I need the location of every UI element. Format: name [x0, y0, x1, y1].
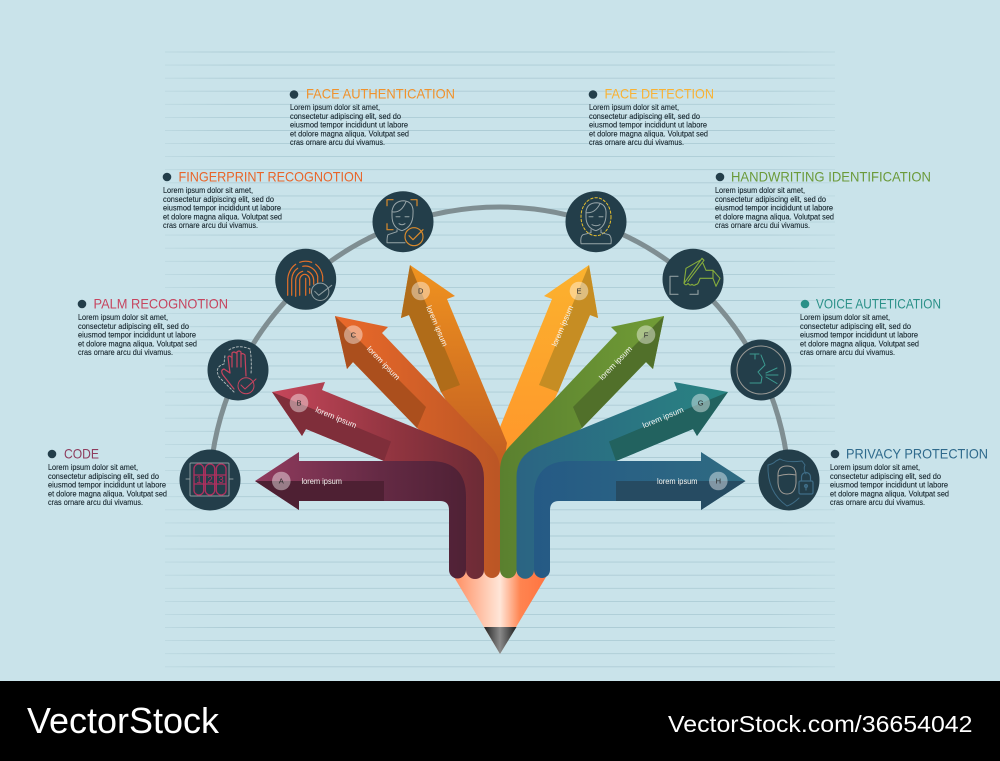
- icon: face authentication: [372, 191, 434, 252]
- body text: consectetur adipiscing elit, sed do: [48, 471, 159, 481]
- letter badges: G: [698, 399, 704, 408]
- body text: eiusmod tempor incididunt ut labore: [48, 480, 166, 490]
- body text: Lorem ipsum dolor sit amet,: [163, 185, 253, 195]
- bullet: [801, 300, 809, 308]
- heading: VOICE AUTETICATION: [816, 296, 941, 312]
- heading: CODE: [64, 446, 99, 462]
- arrow labels: lorem ipsum: [550, 304, 575, 348]
- body text: cras ornare arcu dui vivamus.: [290, 137, 385, 147]
- arrow B: palm: [272, 382, 484, 579]
- body text: cras ornare arcu dui vivamus.: [78, 347, 173, 357]
- body text: et dolore magna aliqua. Volutpat sed: [715, 211, 834, 221]
- heading: PRIVACY PROTECTION: [846, 446, 988, 462]
- heading: FACE DETECTION: [604, 86, 714, 102]
- arrow A: code: [255, 452, 466, 578]
- body text: et dolore magna aliqua. Volutpat sed: [78, 338, 197, 348]
- body text: [830, 462, 949, 507]
- body text: Lorem ipsum dolor sit amet,: [78, 312, 168, 322]
- body text: consectetur adipiscing elit, sed do: [589, 111, 700, 121]
- bullet: [589, 90, 597, 99]
- body text: cras ornare arcu dui vivamus.: [715, 220, 810, 230]
- letter badges: H: [716, 477, 721, 486]
- footer bar: [0, 681, 1000, 761]
- icon: handwriting: [662, 249, 724, 310]
- body text: et dolore magna aliqua. Volutpat sed: [589, 128, 708, 138]
- letter badges: B: [296, 399, 302, 408]
- pencil tip: [451, 565, 549, 654]
- heading: HANDWRITING IDENTIFICATION: [731, 169, 931, 185]
- panel: face detection: [589, 86, 714, 147]
- body text: cras ornare arcu dui vivamus.: [163, 220, 258, 230]
- body text: [78, 312, 197, 357]
- body text: Lorem ipsum dolor sit amet,: [800, 312, 890, 322]
- letter badges: E: [576, 287, 582, 296]
- panel: palm recognition: [78, 296, 228, 357]
- arrow D: face authentication: [401, 265, 507, 490]
- body text: [163, 185, 282, 230]
- footer logo: VectorStock: [27, 700, 220, 741]
- body text: cras ornare arcu dui vivamus.: [800, 347, 895, 357]
- arrow C: fingerprint: [335, 316, 500, 578]
- panel: privacy protection: [830, 446, 988, 507]
- icon: code keypad: 2: [207, 475, 213, 486]
- arrow labels: lorem ipsum: [641, 405, 685, 430]
- footer url: VectorStock.com/36654042: [668, 711, 972, 737]
- letter badges: C: [351, 330, 357, 339]
- body text: cras ornare arcu dui vivamus.: [48, 497, 143, 507]
- arrow labels: lorem ipsum: [365, 344, 402, 382]
- panel: face authentication: [290, 86, 455, 147]
- letter badges: F: [644, 330, 649, 339]
- body text: et dolore magna aliqua. Volutpat sed: [830, 488, 949, 498]
- heading: FINGERPRINT RECOGNOTION: [178, 169, 363, 185]
- body text: eiusmod tempor incididunt ut labore: [589, 120, 707, 130]
- icon: privacy shield: [758, 450, 820, 510]
- body text: consectetur adipiscing elit, sed do: [163, 194, 274, 204]
- panel: handwriting identification: [715, 169, 931, 230]
- heading: PALM RECOGNOTION: [94, 296, 228, 312]
- body text: et dolore magna aliqua. Volutpat sed: [290, 128, 409, 138]
- bullet: [290, 90, 298, 99]
- body text: et dolore magna aliqua. Volutpat sed: [800, 338, 919, 348]
- body text: [48, 462, 167, 507]
- body text: consectetur adipiscing elit, sed do: [290, 111, 401, 121]
- body text: Lorem ipsum dolor sit amet,: [290, 102, 380, 112]
- body text: consectetur adipiscing elit, sed do: [78, 321, 189, 331]
- icon: voice: [730, 340, 792, 400]
- body text: Lorem ipsum dolor sit amet,: [715, 185, 805, 195]
- panel: code: [48, 446, 167, 507]
- arrow labels: lorem ipsum: [302, 477, 342, 486]
- letter badges: A: [279, 477, 284, 486]
- bullet: [48, 450, 56, 458]
- letter badges: [272, 282, 728, 490]
- body text: et dolore magna aliqua. Volutpat sed: [163, 211, 282, 221]
- body text: [589, 102, 708, 147]
- body text: eiusmod tempor incididunt ut labore: [290, 120, 408, 130]
- body text: [715, 185, 834, 230]
- bullet: [716, 173, 724, 181]
- body text: consectetur adipiscing elit, sed do: [800, 321, 911, 331]
- arrow G: voice: [516, 382, 728, 579]
- arrow F: handwriting: [500, 316, 664, 578]
- connecting arc: [210, 207, 789, 480]
- bullet: [163, 173, 171, 181]
- body text: cras ornare arcu dui vivamus.: [830, 497, 925, 507]
- icon: code keypad: 1: [196, 475, 202, 486]
- icon: fingerprint: [275, 249, 336, 310]
- arrow labels: lorem ipsum: [314, 405, 358, 430]
- body text: eiusmod tempor incididunt ut labore: [163, 202, 281, 212]
- arrow labels: lorem ipsum: [597, 344, 634, 382]
- arrow labels: [302, 304, 698, 486]
- arrow labels: lorem ipsum: [657, 477, 698, 486]
- arrow E: face detection: [500, 265, 598, 490]
- body text: eiusmod tempor incididunt ut labore: [800, 330, 918, 340]
- arrow H: privacy: [534, 452, 746, 578]
- body text: et dolore magna aliqua. Volutpat sed: [48, 488, 167, 498]
- body text: Lorem ipsum dolor sit amet,: [830, 462, 920, 472]
- panel: voice authentication: [800, 296, 941, 357]
- body text: eiusmod tempor incididunt ut labore: [830, 480, 948, 490]
- body text: consectetur adipiscing elit, sed do: [830, 471, 941, 481]
- letter badges: D: [418, 287, 424, 296]
- body text: [290, 102, 409, 147]
- body text: cras ornare arcu dui vivamus.: [589, 137, 684, 147]
- bullet: [78, 300, 86, 308]
- body text: consectetur adipiscing elit, sed do: [715, 194, 826, 204]
- icon: palm: [208, 340, 268, 400]
- icon: code keypad: [180, 450, 240, 510]
- icon: face detection: [566, 191, 626, 252]
- body text: eiusmod tempor incididunt ut labore: [78, 330, 196, 340]
- panel: fingerprint recognition: [163, 169, 363, 230]
- icon: code keypad: 3: [218, 475, 224, 486]
- body text: [800, 312, 919, 357]
- body text: Lorem ipsum dolor sit amet,: [48, 462, 138, 472]
- body text: eiusmod tempor incididunt ut labore: [715, 202, 833, 212]
- bullet: [831, 450, 839, 458]
- heading: FACE AUTHENTICATION: [306, 86, 455, 102]
- arrow labels: lorem ipsum: [424, 304, 450, 348]
- body text: Lorem ipsum dolor sit amet,: [589, 102, 679, 112]
